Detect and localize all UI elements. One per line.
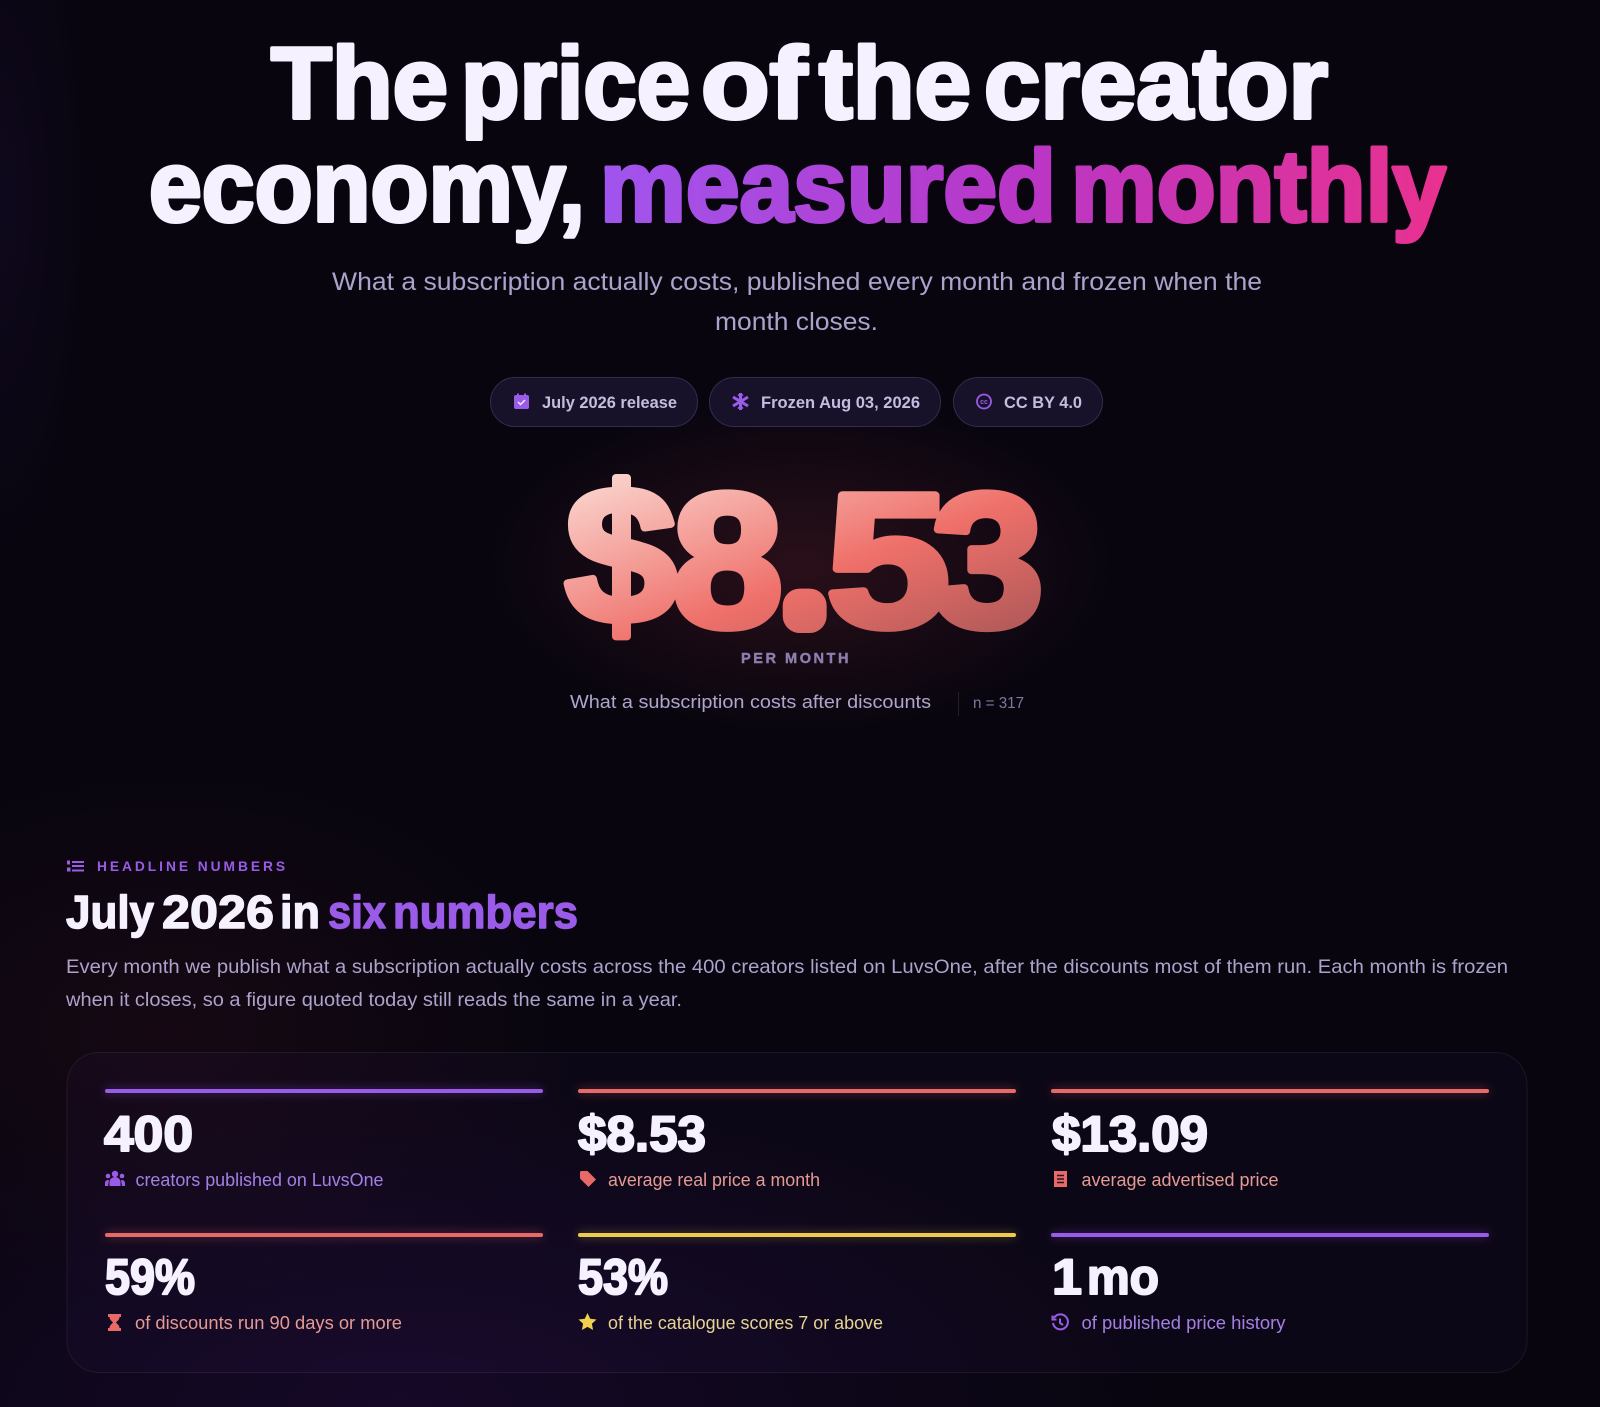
stat: creators: creators published on LuvsOne — [136, 1170, 384, 1190]
subtitle: What a subscription actually costs, published every month and frozen when the — [332, 268, 1262, 296]
section intro text: Every month we publish what a subscription actually costs across the 400 creators listed on LuvsOne, after the discounts most of them run. Each month is frozen — [66, 956, 1508, 978]
stat: price history: 1 — [1052, 1249, 1082, 1305]
stat: catalogue score: 53% — [578, 1249, 668, 1305]
pill: release — [490, 378, 698, 426]
section intro text — [65, 956, 1508, 1011]
icon: users — [105, 1171, 125, 1186]
section heading: 2026 — [162, 886, 274, 938]
hero caption: n = 317 — [973, 695, 1024, 712]
icon: numbered list — [67, 860, 84, 872]
hero price: 3 — [931, 455, 1044, 667]
title: price — [461, 28, 690, 140]
icon: star — [579, 1313, 596, 1330]
icon: price tag — [580, 1171, 596, 1187]
stat: catalogue score — [578, 1233, 1016, 1333]
hero price: 8 — [672, 455, 783, 667]
hero price — [565, 447, 1044, 667]
stat: price history: of published price history — [1082, 1313, 1286, 1333]
hero price: $ — [565, 447, 677, 664]
stat: advertised price — [1051, 1089, 1489, 1190]
subtitle: month closes. — [715, 308, 878, 336]
stat: price history — [1051, 1233, 1489, 1333]
stat: real price: average real price a month — [608, 1170, 820, 1190]
stat: discounts duration — [105, 1233, 543, 1333]
title: monthly — [1071, 131, 1446, 243]
stat: advertised price: average advertised price — [1082, 1170, 1278, 1190]
title: measured — [600, 131, 1056, 243]
stat: creators — [104, 1089, 543, 1190]
pill: release: July 2026 release — [542, 393, 677, 412]
section heading: numbers — [393, 886, 578, 938]
hero caption — [570, 691, 1024, 716]
icon: snowflake — [733, 393, 748, 410]
stat: creators: 400 — [104, 1106, 193, 1162]
section heading — [66, 886, 578, 938]
section intro text: when it closes, so a figure quoted today still reads the same in a year. — [65, 989, 682, 1011]
stat: real price — [578, 1089, 1016, 1190]
pill: licence: CC BY 4.0 — [1004, 393, 1082, 412]
stat: discounts duration: of discounts run 90 days or more — [135, 1313, 402, 1333]
section heading: six — [328, 886, 386, 938]
title: creator — [984, 28, 1328, 140]
stat: price history: mo — [1087, 1249, 1159, 1305]
title — [149, 28, 1446, 243]
icon: calendar check — [514, 394, 529, 409]
icon: hourglass — [108, 1314, 121, 1331]
icon: creative commons — [977, 394, 991, 408]
section heading: July — [66, 886, 154, 938]
hero price: 5 — [826, 455, 950, 667]
stat: advertised price: $13.09 — [1052, 1106, 1208, 1162]
section eyebrow: HEADLINE NUMBERS — [97, 858, 288, 874]
stat: catalogue score: of the catalogue scores 7 or above — [608, 1313, 883, 1333]
title: the — [819, 28, 971, 140]
subtitle — [332, 268, 1262, 336]
pill: licence — [954, 378, 1102, 426]
panel: stats — [67, 1052, 1527, 1372]
pill: frozen: Frozen Aug 03, 2026 — [761, 393, 920, 412]
hero caption: What a subscription costs after discounts — [570, 691, 931, 712]
title: The — [271, 28, 448, 140]
icon: receipt — [1054, 1171, 1067, 1187]
section heading: in — [280, 886, 320, 938]
hero price: . — [795, 553, 814, 631]
title: of — [701, 28, 807, 140]
stat: discounts duration: 59% — [105, 1249, 195, 1305]
per month label: PER MONTH — [741, 651, 851, 667]
pill: frozen — [710, 378, 940, 426]
title: economy, — [149, 131, 585, 243]
icon: history clock — [1052, 1314, 1068, 1329]
stat: real price: $8.53 — [578, 1106, 706, 1162]
icon: creative commons: cc — [980, 399, 988, 406]
